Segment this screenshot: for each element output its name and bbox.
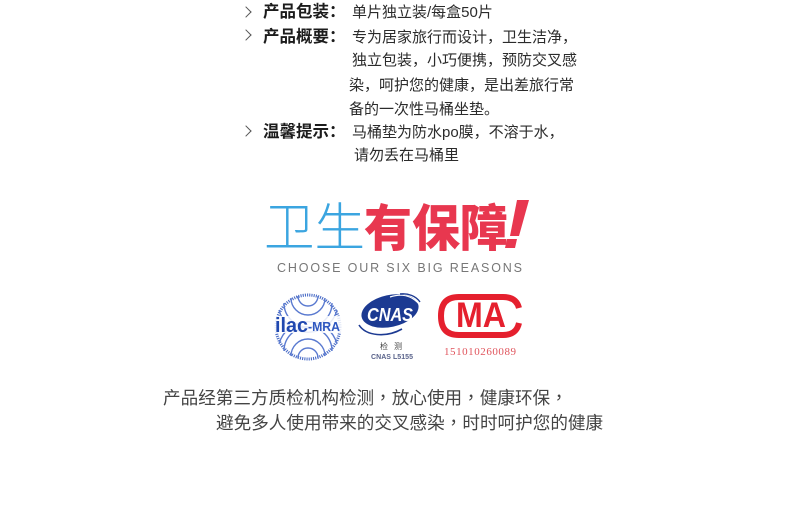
arrow: overview bbox=[240, 29, 252, 41]
title: red part: 有保障 bbox=[364, 190, 508, 261]
text: certification line 2: 避免多人使用带来的交叉感染，时时呵护您的健康 bbox=[216, 410, 603, 435]
logo: ilac-MRA: -MRA bbox=[308, 319, 341, 334]
arrow: tips bbox=[240, 125, 252, 137]
logo: CNAS: 检测 bbox=[380, 341, 402, 352]
logo: CMA bbox=[438, 294, 522, 358]
text: packaging: 单片独立装/每盒50片 bbox=[352, 4, 493, 21]
logo: CNAS: CNAS bbox=[367, 305, 413, 325]
logo: CNAS: CNAS L5155 bbox=[371, 354, 413, 361]
heading: tips: 温馨提示： bbox=[263, 123, 346, 141]
title graphic bbox=[264, 190, 529, 275]
logo: ilac-MRA bbox=[274, 294, 342, 360]
arrow: packaging bbox=[240, 6, 252, 18]
heading: overview: 产品概要： bbox=[263, 28, 346, 46]
panel: product details bbox=[245, 2, 577, 164]
text: overview bbox=[349, 29, 577, 118]
text: tips bbox=[352, 124, 564, 164]
logo: CMA: 151010260089 bbox=[444, 346, 516, 358]
logo: ilac-MRA: ilac bbox=[275, 315, 308, 337]
text: overview: 独立包装，小巧便携，预防交叉感 bbox=[352, 52, 577, 69]
text: certification line 1: 产品经第三方质检机构检测，放心使用，健康环保， bbox=[163, 385, 568, 410]
heading: packaging: 产品包装： bbox=[263, 3, 346, 21]
subtitle: CHOOSE OUR SIX BIG REASONS bbox=[277, 261, 522, 275]
text: tips: 马桶垫为防水po膜，不溶于水， bbox=[352, 124, 564, 141]
text: tips: 请勿丢在马桶里 bbox=[354, 147, 459, 164]
text: overview: 专为居家旅行而设计，卫生洁净， bbox=[352, 29, 577, 46]
title: exclamation mark bbox=[505, 200, 529, 248]
logo: CMA: MA bbox=[456, 296, 506, 335]
text: overview: 染，呵护您的健康，是出差旅行常 bbox=[349, 77, 574, 94]
logo: CNAS bbox=[358, 293, 420, 361]
text: overview: 备的一次性马桶坐垫。 bbox=[349, 101, 499, 118]
